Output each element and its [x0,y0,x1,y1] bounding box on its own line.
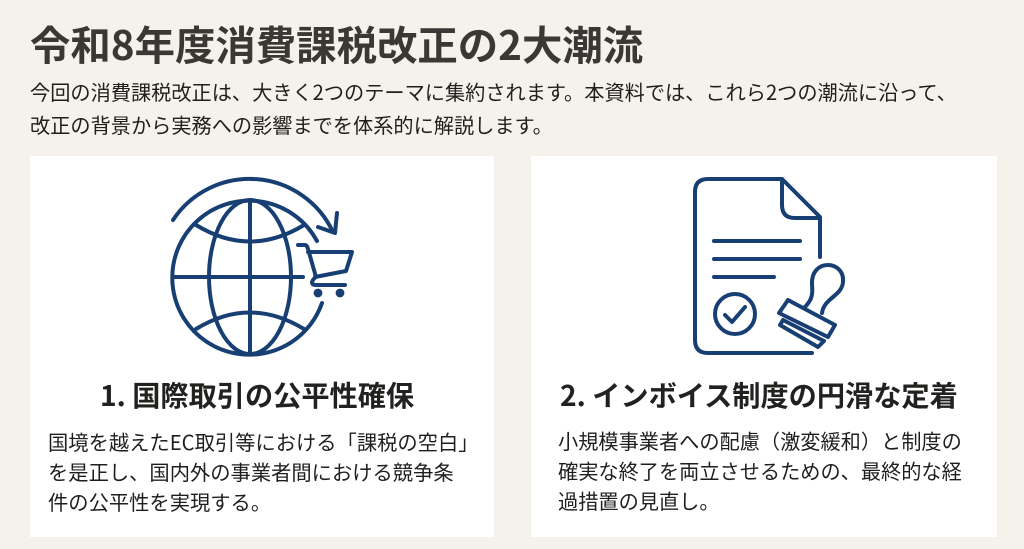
text: card 2: 確実な終了を両立させるための、最終的な経 [558,456,962,485]
text: card 2: 小規模事業者への配慮（激変緩和）と制度の [558,426,962,455]
heading: card 2: 2. インボイス制度の円滑な定着 [560,374,958,415]
icon: globe with cart [170,176,354,357]
panel: invoice system [531,156,997,537]
text: card 1: 件の公平性を実現する。 [48,486,271,516]
text: card 1: 国境を越えたEC取引等における「課税の空白」 [48,426,479,456]
panel: international trade [30,156,494,537]
icon: document with stamp [693,177,846,355]
text: card 2 [558,426,962,515]
intro text: 改正の背景から実務への影響までを体系的に解説します。 [30,110,553,139]
title: 令和8年度消費課税改正の2大潮流 [30,13,643,72]
text: card 1: を是正し、国内外の事業者間における競争条 [48,456,454,486]
intro text [30,77,957,139]
text: card 2: 過措置の見直し。 [558,486,720,515]
text: card 1 [48,426,479,516]
heading: card 1: 1. 国際取引の公平性確保 [100,374,414,415]
intro text: 今回の消費課税改正は、大きく2つのテーマに集約されます。本資料では、これら2つの潮流に沿って、 [30,77,957,106]
